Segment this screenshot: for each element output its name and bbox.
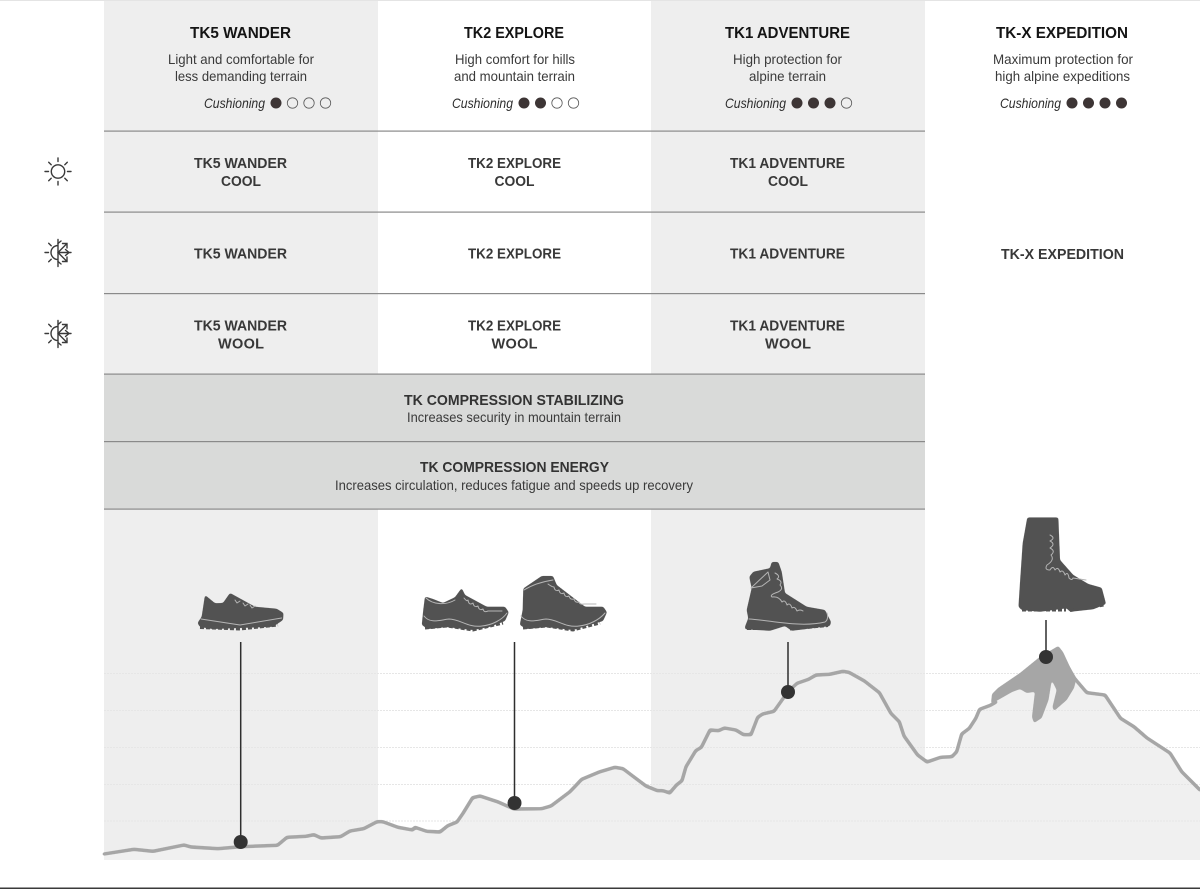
row: standard: TK2 EXPLORE bbox=[468, 246, 561, 262]
row: standard: TK-X EXPEDITION bbox=[1001, 247, 1124, 263]
icon: sun bbox=[45, 158, 71, 185]
row: wool: TK2 EXPLORE bbox=[468, 318, 561, 334]
band: compression stabilizing: Increases security in mountain terrain bbox=[407, 409, 621, 425]
marker: TK5 Wander on terrain bbox=[234, 642, 248, 849]
rating: cushioning 4 of 4 bbox=[1066, 98, 1127, 108]
icon: alpine boot bbox=[745, 562, 831, 631]
header: TK5 Wander: Cushioning bbox=[204, 95, 265, 111]
row: cool: COOL bbox=[768, 174, 808, 190]
row: standard: TK5 WANDER bbox=[194, 246, 288, 262]
row: cool: COOL bbox=[221, 174, 261, 190]
header: TK-X Expedition: Cushioning bbox=[1000, 95, 1061, 111]
row: wool: WOOL bbox=[218, 336, 264, 352]
header: TK2 Explore: High comfort for hills bbox=[455, 51, 575, 67]
row: standard: TK1 ADVENTURE bbox=[730, 246, 845, 262]
header: TK-X Expedition: TK-X EXPEDITION bbox=[996, 25, 1128, 42]
header: TK-X Expedition: high alpine expeditions bbox=[995, 68, 1130, 84]
band: compression energy: TK COMPRESSION ENERGY bbox=[420, 459, 609, 476]
icon: hiking shoe and mid boot bbox=[422, 576, 607, 630]
header: TK1 Adventure: High protection for bbox=[733, 51, 842, 67]
header: TK1 Adventure: alpine terrain bbox=[749, 68, 826, 84]
row: cool bbox=[194, 156, 845, 190]
header: TK2 Explore: TK2 EXPLORE bbox=[464, 25, 564, 42]
icon: low trail shoe bbox=[198, 593, 284, 629]
column band: TK1 Adventure bbox=[651, 1, 925, 860]
icon: sun and snowflake, all-season bbox=[45, 240, 71, 266]
band: compression energy bbox=[335, 459, 693, 493]
row: wool: TK5 WANDER bbox=[194, 318, 288, 334]
row: cool: TK5 WANDER bbox=[194, 156, 288, 172]
rating: cushioning 2 of 4 bbox=[518, 98, 579, 108]
row: cool: TK2 EXPLORE bbox=[468, 156, 561, 172]
header: TK1 Adventure: Cushioning bbox=[725, 95, 786, 111]
row: wool: TK1 ADVENTURE bbox=[730, 318, 845, 334]
row: wool: WOOL bbox=[765, 336, 811, 352]
terrain ridge line bbox=[104, 660, 1200, 854]
row: wool bbox=[194, 318, 845, 352]
column band: TK5 Wander bbox=[104, 1, 378, 860]
row: cool: TK1 ADVENTURE bbox=[730, 156, 845, 172]
header: TK1 Adventure: TK1 ADVENTURE bbox=[725, 25, 850, 42]
band: compression stabilizing: TK COMPRESSION STABILIZING bbox=[404, 392, 624, 409]
header: TK2 Explore bbox=[452, 25, 579, 111]
snow cap on the peak bbox=[991, 646, 1076, 723]
header: TK5 Wander: less demanding terrain bbox=[175, 68, 307, 84]
marker: TK1 Adventure on terrain bbox=[781, 642, 795, 699]
row: wool: WOOL bbox=[492, 336, 538, 352]
panel: compression bands bbox=[104, 374, 925, 509]
rating: cushioning 3 of 4 bbox=[792, 98, 852, 108]
header: TK5 Wander: TK5 WANDER bbox=[190, 25, 291, 42]
row: cool: COOL bbox=[494, 174, 535, 190]
grid lines bbox=[104, 674, 1200, 821]
header: TK-X Expedition: Maximum protection for bbox=[993, 51, 1133, 67]
header: TK2 Explore: Cushioning bbox=[452, 95, 513, 111]
marker: TK-X Expedition on terrain bbox=[1039, 620, 1053, 664]
header: TK-X Expedition bbox=[993, 25, 1133, 111]
row: standard bbox=[194, 246, 1124, 263]
band: compression stabilizing bbox=[404, 392, 624, 425]
header: TK5 Wander bbox=[168, 25, 331, 111]
header: TK1 Adventure bbox=[725, 25, 852, 111]
icon: sun and snowflake, wool bbox=[45, 320, 71, 348]
chart: mountain terrain profile bbox=[104, 646, 1200, 860]
marker: TK2 Explore on terrain bbox=[508, 642, 522, 810]
header: TK5 Wander: Light and comfortable for bbox=[168, 51, 314, 67]
icon: expedition boot bbox=[1018, 518, 1106, 612]
band: compression energy: Increases circulation, reduces fatigue and speeds up recovery bbox=[335, 477, 693, 493]
rating: cushioning 1 of 4 bbox=[270, 98, 331, 108]
header: TK2 Explore: and mountain terrain bbox=[454, 68, 575, 84]
